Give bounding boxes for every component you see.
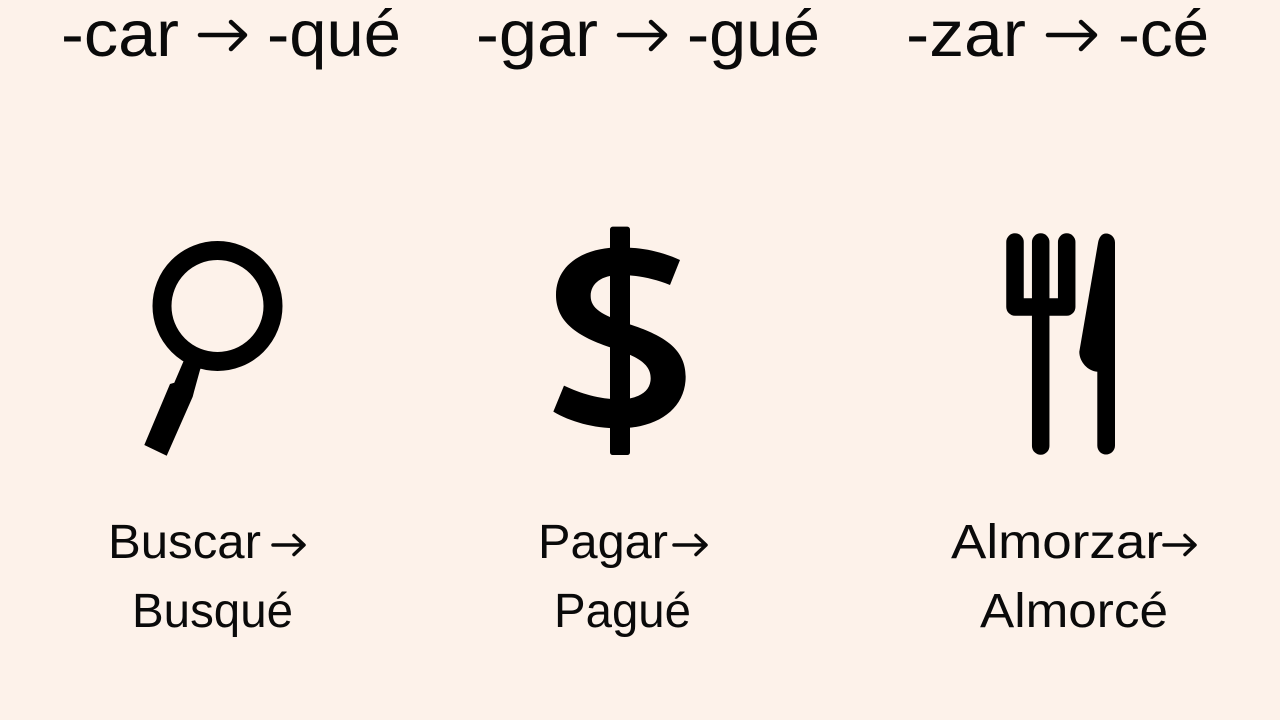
arrow: label Pagar [674,536,706,554]
column: -car rule [61,0,401,638]
arrow: heading -gar [619,22,665,49]
label: Pagar to Pagué: Pagué [554,585,691,638]
label: Buscar to Busqué: Buscar [108,516,261,569]
label: Almorzar to Almorcé: Almorzar [951,516,1163,569]
label: Buscar to Busqué [108,516,304,638]
arrow: label Buscar [273,536,304,554]
icon: magnifying glass [144,250,273,456]
icon: dollar sign [553,227,686,455]
arrow: heading -car [200,22,245,49]
label: Almorzar to Almorcé: Almorcé [980,585,1168,638]
arrow: label Almorzar [1164,536,1195,554]
heading: -gar to -gué [476,0,820,70]
label: Pagar to Pagué [538,516,706,638]
label: Pagar to Pagué: Pagar [538,516,668,569]
arrow: heading -zar [1048,22,1095,49]
heading: -zar to -cé [906,0,1209,70]
label: Almorzar to Almorcé [951,516,1195,638]
icon: fork and knife [1015,234,1115,454]
column: -gar rule [476,0,820,638]
label: Buscar to Busqué: Busqué [132,585,293,638]
column: -zar rule [906,0,1209,638]
heading: -car to -qué [61,0,401,70]
